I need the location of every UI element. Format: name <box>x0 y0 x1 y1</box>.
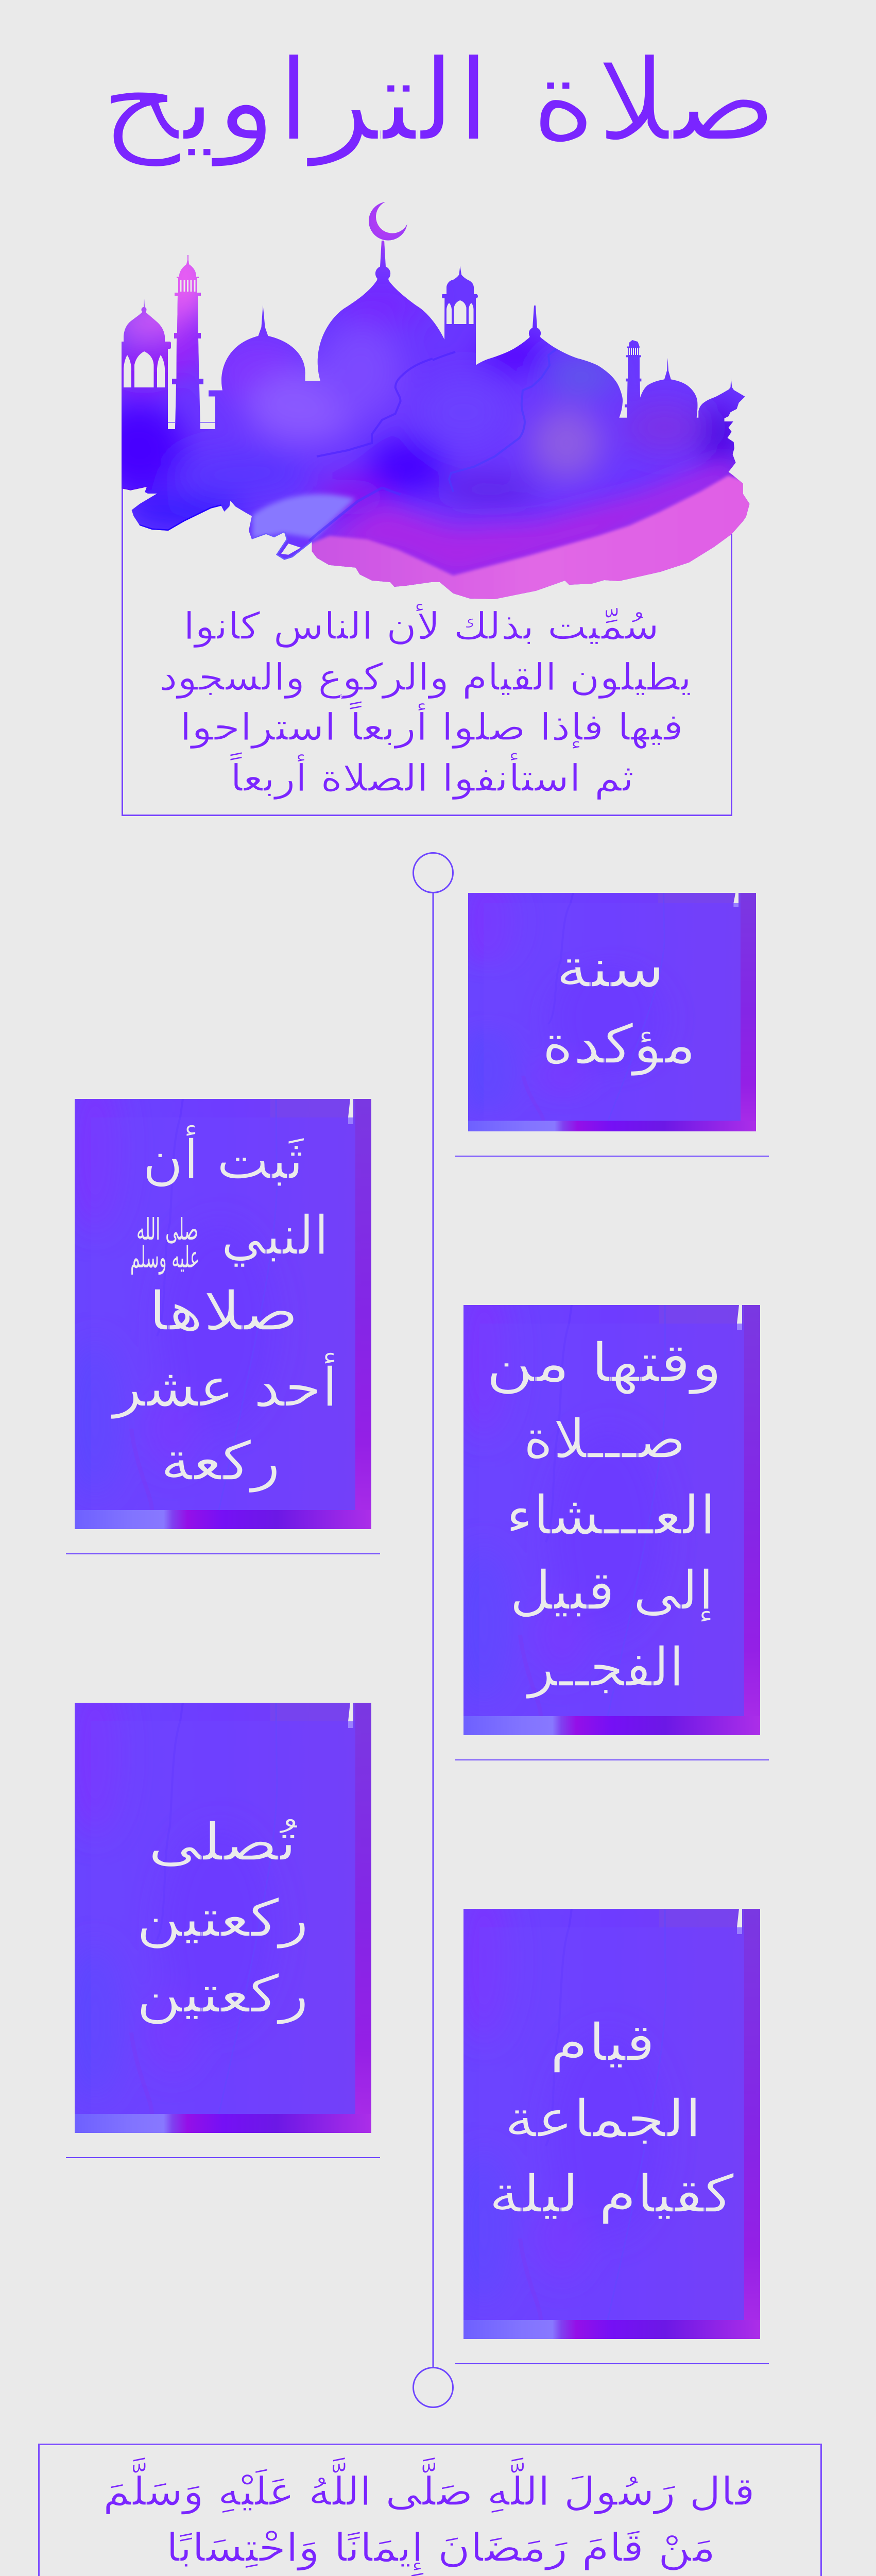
panel: hadith box <box>39 2444 821 2576</box>
intro text <box>159 603 692 800</box>
card 4: تُصلى <box>148 1812 298 1872</box>
panel: hadith box: قال رَسُولَ اللَّهِ صَلَّى اللَّهُ عَلَيْهِ وَسَلَّمَ <box>103 2456 755 2515</box>
icon: salawat calligraphy: صلى الله <box>136 1212 198 1247</box>
icon: salawat calligraphy: عليه وسلم <box>130 1240 199 1275</box>
intro text: ثم استأنفوا الصلاة أربعاً <box>230 752 634 800</box>
card 2: صلاها <box>148 1280 299 1343</box>
card 5: قيام <box>550 2012 655 2073</box>
card 3 <box>455 1274 769 1760</box>
card 5: كقيام ليلة <box>489 2164 734 2224</box>
card 2 <box>66 1068 380 1554</box>
card 3: إلى قبيل <box>510 1559 714 1622</box>
intro text: سُمِّيت بذلك لأن الناس كانوا <box>183 603 659 648</box>
card 3: العـــشاء <box>506 1484 716 1547</box>
card 1: مؤكدة <box>542 1013 696 1076</box>
timeline <box>413 853 453 2407</box>
panel: hadith box: مَنْ قَامَ رَمَضَانَ إِيمَانًا وَاحْتِسَابًا <box>166 2524 716 2576</box>
icon: salawat calligraphy <box>130 1212 199 1275</box>
card 2: ركعة <box>161 1430 280 1493</box>
card 1: سنة <box>556 937 665 999</box>
card 5: الجماعة <box>505 2089 701 2149</box>
illustration: watercolor mosque <box>122 202 750 599</box>
card 2: أحد عشر <box>110 1352 338 1419</box>
card 3: صـــلاة <box>523 1408 686 1470</box>
intro text: فيها فإذا صلوا أربعاً استراحوا <box>180 701 683 749</box>
intro text: يطيلون القيام والركوع والسجود <box>159 655 692 699</box>
title: صلاة التراويح <box>100 35 778 167</box>
card 2: ثَبت أن <box>142 1125 304 1191</box>
card 4 <box>66 1672 380 2158</box>
card 5 <box>455 1878 769 2364</box>
card 3: وقتها من <box>486 1331 722 1395</box>
panel: intro box outline <box>123 488 731 815</box>
card 1 <box>455 876 769 1157</box>
card 4: ركعتين <box>136 1888 309 1949</box>
card 3: الفجــر <box>525 1636 684 1699</box>
card 2: النبي <box>221 1204 329 1267</box>
card 4: ركعتين <box>136 1964 309 2025</box>
mosque windows and gaps <box>124 280 638 555</box>
